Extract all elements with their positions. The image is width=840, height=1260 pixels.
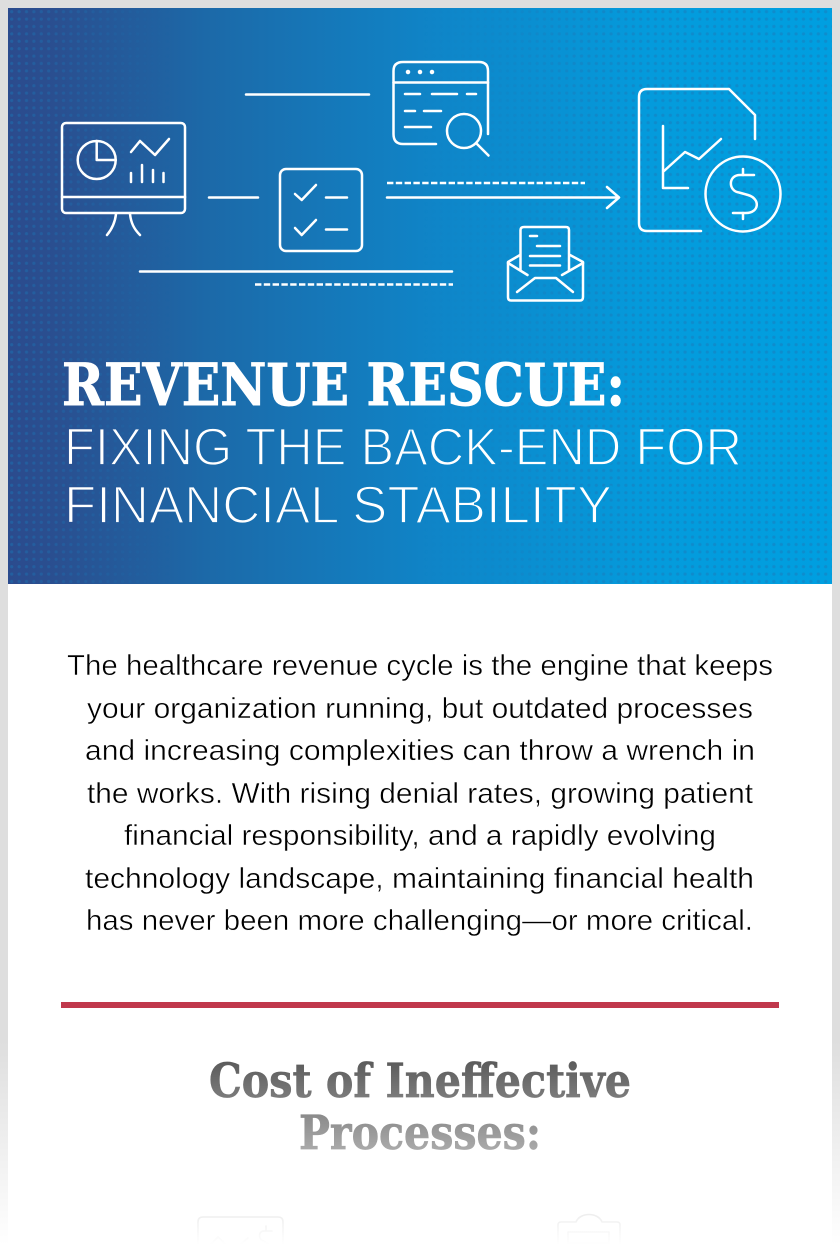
connector line: to checklist xyxy=(209,196,258,199)
intro paragraph: the works. With rising denial rates, growing patient xyxy=(87,778,753,810)
intro paragraph: your organization running, but outdated processes xyxy=(87,693,753,725)
divider: red rule xyxy=(61,1002,779,1008)
fade overlay xyxy=(0,1040,840,1245)
intro paragraph: The healthcare revenue cycle is the engine that keeps xyxy=(67,650,773,682)
icon: open envelope xyxy=(508,227,583,300)
heading: cost of ineffective processes: Processes: xyxy=(299,1106,541,1161)
dashed line: above arrow xyxy=(387,182,585,184)
heading: cost of ineffective processes: Cost of Ineffective xyxy=(209,1054,631,1109)
icon: dashboard monitor xyxy=(62,123,185,235)
line: lower long xyxy=(140,270,452,273)
heading: cost of ineffective processes xyxy=(209,1054,631,1161)
title: REVENUE RESCUE: xyxy=(62,351,625,419)
icon: financial report with dollar xyxy=(639,89,780,232)
icon: search window xyxy=(394,62,488,156)
intro paragraph xyxy=(67,650,773,937)
icon: checklist xyxy=(280,169,362,251)
intro paragraph: financial responsibility, and a rapidly evolving xyxy=(124,820,716,852)
intro paragraph: and increasing complexities can throw a wrench in xyxy=(85,735,755,767)
intro paragraph: technology landscape, maintaining financial health xyxy=(85,863,754,895)
title xyxy=(62,351,742,535)
bottom white strip xyxy=(0,1245,840,1260)
intro paragraph: has never been more challenging—or more critical. xyxy=(86,905,753,937)
connector line: top xyxy=(246,93,369,96)
title: FIXING THE BACK-END FOR xyxy=(64,418,742,477)
dashed line: lower xyxy=(255,283,453,286)
icon: faded clipboard xyxy=(558,1214,620,1250)
panel: hero banner xyxy=(8,8,832,584)
icon: faded financial chart xyxy=(198,1217,283,1250)
arrow xyxy=(387,187,619,208)
title: FINANCIAL STABILITY xyxy=(64,476,612,535)
